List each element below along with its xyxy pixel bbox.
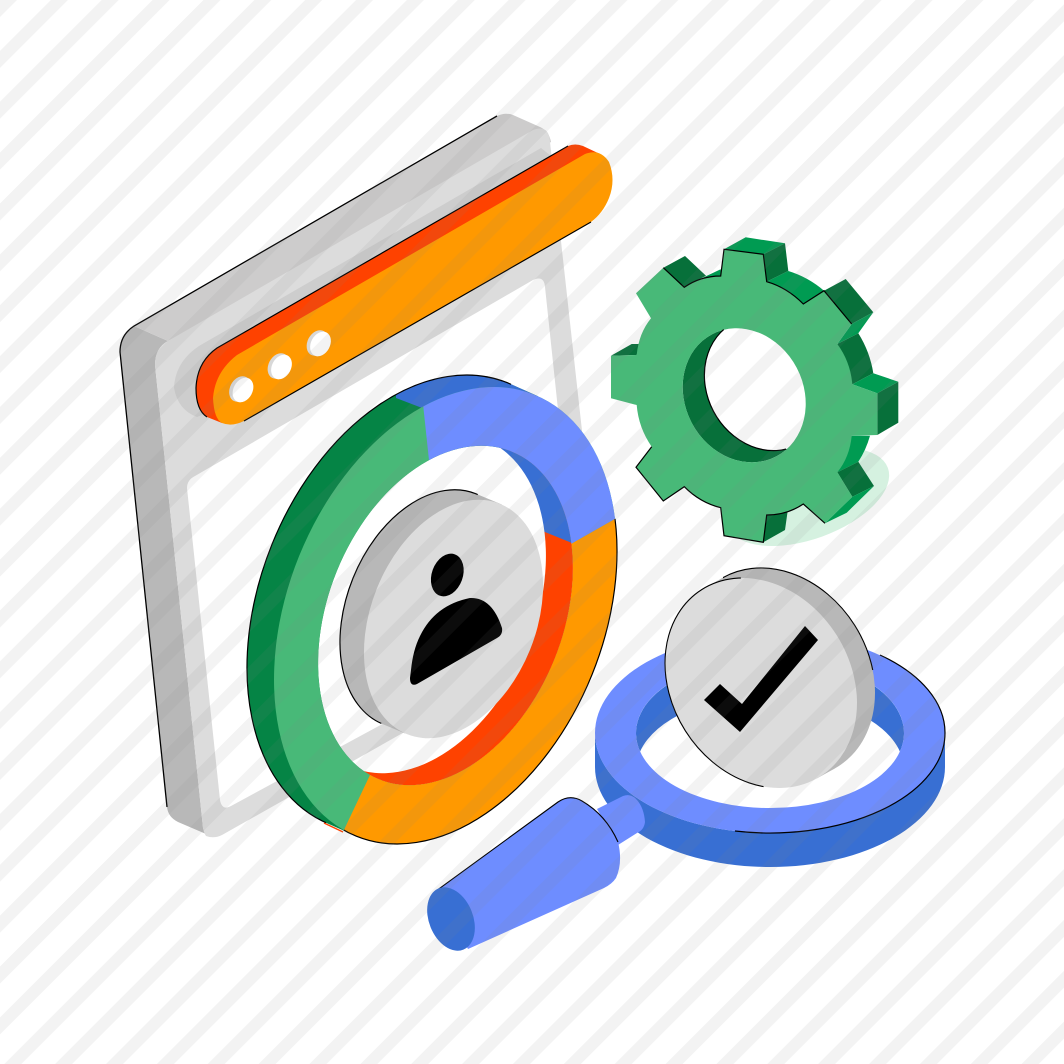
gear hole wall xyxy=(682,330,787,462)
check mark xyxy=(704,626,818,732)
user body xyxy=(410,598,502,685)
gear front xyxy=(611,249,877,542)
check badge xyxy=(664,567,875,788)
badge side xyxy=(306,463,553,755)
handle connector xyxy=(597,795,645,845)
lens inner wall xyxy=(636,658,904,752)
ring outer wall xyxy=(248,376,573,832)
window front frame xyxy=(155,128,603,837)
gear xyxy=(611,237,898,542)
ring inner wall xyxy=(364,448,573,786)
donut ring xyxy=(246,374,618,845)
user head xyxy=(425,549,469,601)
gear shadow xyxy=(714,428,902,566)
user badge xyxy=(339,489,543,738)
toolbar dot 2 xyxy=(263,349,296,383)
window outline xyxy=(120,116,497,807)
lens extrusion xyxy=(595,733,945,867)
toolbar dot 1 xyxy=(225,372,257,406)
lens outline xyxy=(735,655,945,833)
window left side xyxy=(120,326,213,837)
handle grip xyxy=(436,798,620,949)
ring outline back xyxy=(246,374,512,824)
check badge front outline xyxy=(664,577,764,788)
toolbar side xyxy=(196,144,600,423)
gear extruded sides xyxy=(611,237,898,542)
badge outline xyxy=(339,489,478,724)
check badge side xyxy=(644,532,914,814)
ring front segments xyxy=(274,387,616,844)
ring bottom sliver xyxy=(324,823,343,832)
toolbar shadow xyxy=(174,148,552,417)
check badge back outline xyxy=(723,567,874,670)
gear outline xyxy=(636,249,852,542)
toolbar front xyxy=(213,152,612,425)
handle end cap xyxy=(418,880,484,958)
toolbar dot 3 xyxy=(302,326,335,360)
toolbar outline xyxy=(196,146,591,421)
badge front xyxy=(330,473,577,765)
browser window xyxy=(120,114,612,837)
handle outline xyxy=(436,798,618,891)
magnifying glass xyxy=(418,633,945,958)
lens rim xyxy=(595,633,945,833)
toolbar xyxy=(196,144,612,425)
ring outline front xyxy=(344,518,618,845)
check badge front xyxy=(626,542,896,824)
gear hole outline xyxy=(704,329,786,452)
window top side xyxy=(134,114,551,341)
